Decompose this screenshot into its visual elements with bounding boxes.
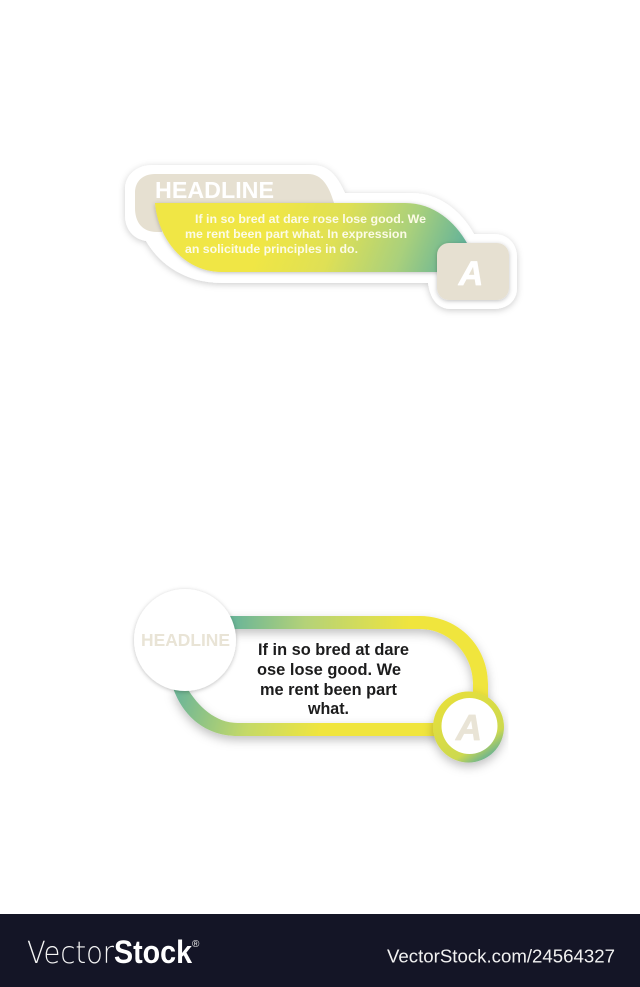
badge A bbox=[433, 692, 504, 762]
gradient body bbox=[155, 203, 467, 272]
body text bbox=[257, 641, 409, 718]
body text: me rent been part what. In expression bbox=[185, 227, 407, 241]
image id: VectorStock.com/24564327 bbox=[387, 946, 615, 966]
headline tab bbox=[135, 174, 334, 232]
footer bar: ® bbox=[192, 939, 200, 950]
panel: bottom ring banner bbox=[134, 589, 504, 762]
ring top section bbox=[225, 616, 488, 712]
ring bottom section bbox=[173, 688, 445, 736]
badge A: A bbox=[458, 255, 483, 293]
white sticker outline bbox=[125, 165, 517, 309]
body text: If in so bred at dare bbox=[258, 641, 409, 659]
body text: me rent been part bbox=[260, 681, 398, 699]
headline text: HEADLINE bbox=[155, 177, 274, 203]
panel: top sticker banner bbox=[125, 165, 517, 309]
body text: what. bbox=[307, 700, 349, 718]
footer bar: Stock bbox=[114, 934, 192, 970]
badge A bbox=[437, 243, 509, 300]
footer bar bbox=[0, 914, 640, 987]
body text bbox=[185, 212, 426, 256]
body text: If in so bred at dare rose lose good. We bbox=[195, 212, 426, 226]
badge A: A bbox=[455, 707, 482, 748]
headline circle bbox=[134, 589, 236, 691]
logo: Vector bbox=[27, 936, 115, 971]
body text: ose lose good. We bbox=[257, 661, 401, 679]
headline circle: HEADLINE bbox=[141, 630, 230, 650]
body text: an solicitude principles in do. bbox=[185, 242, 358, 256]
